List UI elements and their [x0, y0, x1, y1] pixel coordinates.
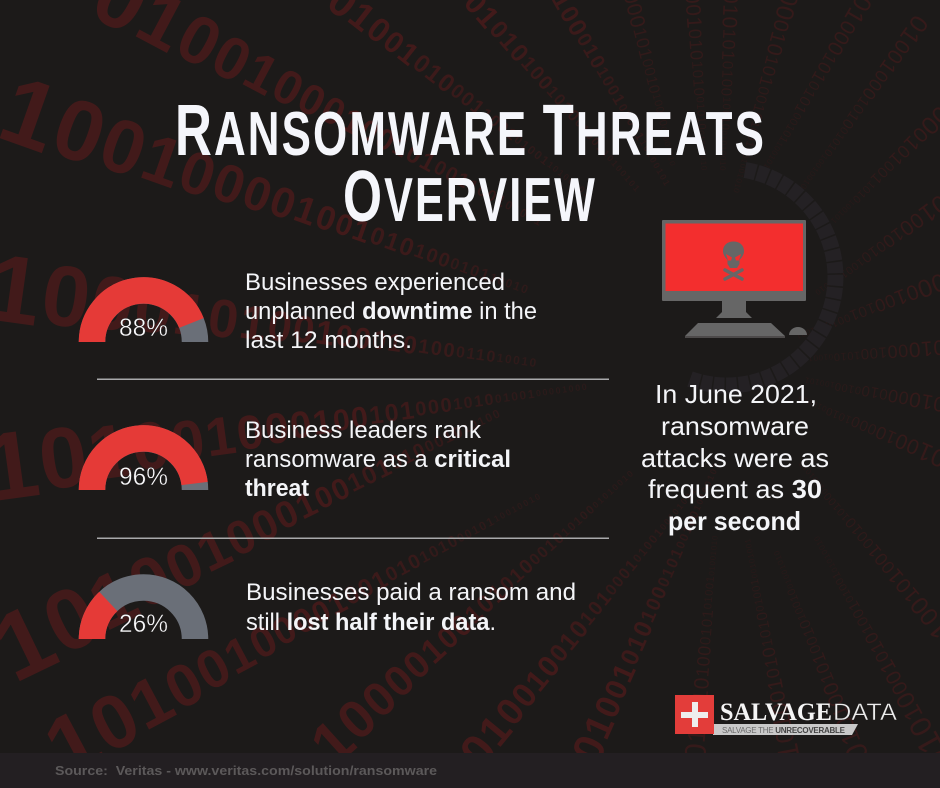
logo: SalvageData: SALVAGE	[720, 699, 832, 726]
logo: SalvageData: DATA	[833, 699, 897, 726]
background: radial binary digit streams: 0100100010100101010010010	[791, 10, 933, 197]
text: June 2021 callout: attacks were as	[641, 443, 829, 473]
logo: SalvageData	[675, 695, 897, 735]
decorative dark ring behind monitor	[690, 170, 835, 385]
title	[175, 91, 766, 237]
footer band	[0, 753, 940, 788]
background: radial binary digit streams: 1000010010101000101010001010010	[298, 446, 655, 778]
gauge: 96%: 96%	[119, 463, 168, 491]
gauge: 26%	[92, 588, 195, 639]
background: radial binary digit streams: 100100001001010100010110010	[0, 55, 547, 341]
logo: SalvageData: SALVAGE THE UNRECOVERABLE	[722, 726, 846, 735]
background: radial binary digit streams: 01001001010100010100100101001	[450, 471, 716, 779]
panel: stat 26%	[92, 579, 583, 639]
text: stat 96% description: ransomware as a critical	[245, 446, 512, 473]
text: June 2021 callout: ransomware	[661, 411, 809, 441]
text: stat 26% description: still lost half their data.	[246, 609, 496, 636]
icon: skull and crossbones	[723, 242, 744, 279]
icon: computer with skull	[662, 220, 807, 338]
background: radial binary digit streams: 0100101010001010010010100101	[563, 452, 740, 770]
panel: stat 88%	[92, 269, 544, 354]
background: radial binary digit streams: 01010010100101001001001010	[760, 544, 875, 766]
title: OVERVIEW	[343, 157, 597, 237]
background: radial binary digit streams: 01001010001010100101001010	[679, 534, 731, 761]
text: stat 88% description: Businesses experienced	[245, 269, 505, 296]
title: RANSOMWARE THREATS	[175, 91, 766, 171]
text: stat 96% description: Business leaders rank	[245, 417, 482, 444]
gauge: 96%	[92, 438, 195, 491]
text: stat 88% description: last 12 months.	[245, 327, 412, 354]
panel: stat 96%	[92, 417, 518, 502]
text: June 2021 callout: In June 2021,	[655, 379, 817, 409]
text: stat 26% description: Businesses paid a ransom and	[246, 579, 576, 606]
background: radial binary digit streams: 10100101010100100100101001	[731, 535, 806, 763]
text: stat 96% description: threat	[245, 475, 309, 502]
text: June 2021 callout: frequent as 30	[648, 474, 821, 504]
gauge: 26%: 26%	[119, 610, 168, 638]
gauge: 88%	[92, 290, 195, 342]
text: stat 88% description: unplanned downtime in the	[245, 298, 538, 325]
source text: Source: Veritas - www.veritas.com/solution/ransomware	[55, 764, 437, 778]
text: June 2021 callout: per second	[668, 506, 801, 536]
gauge: 88%: 88%	[119, 314, 168, 342]
